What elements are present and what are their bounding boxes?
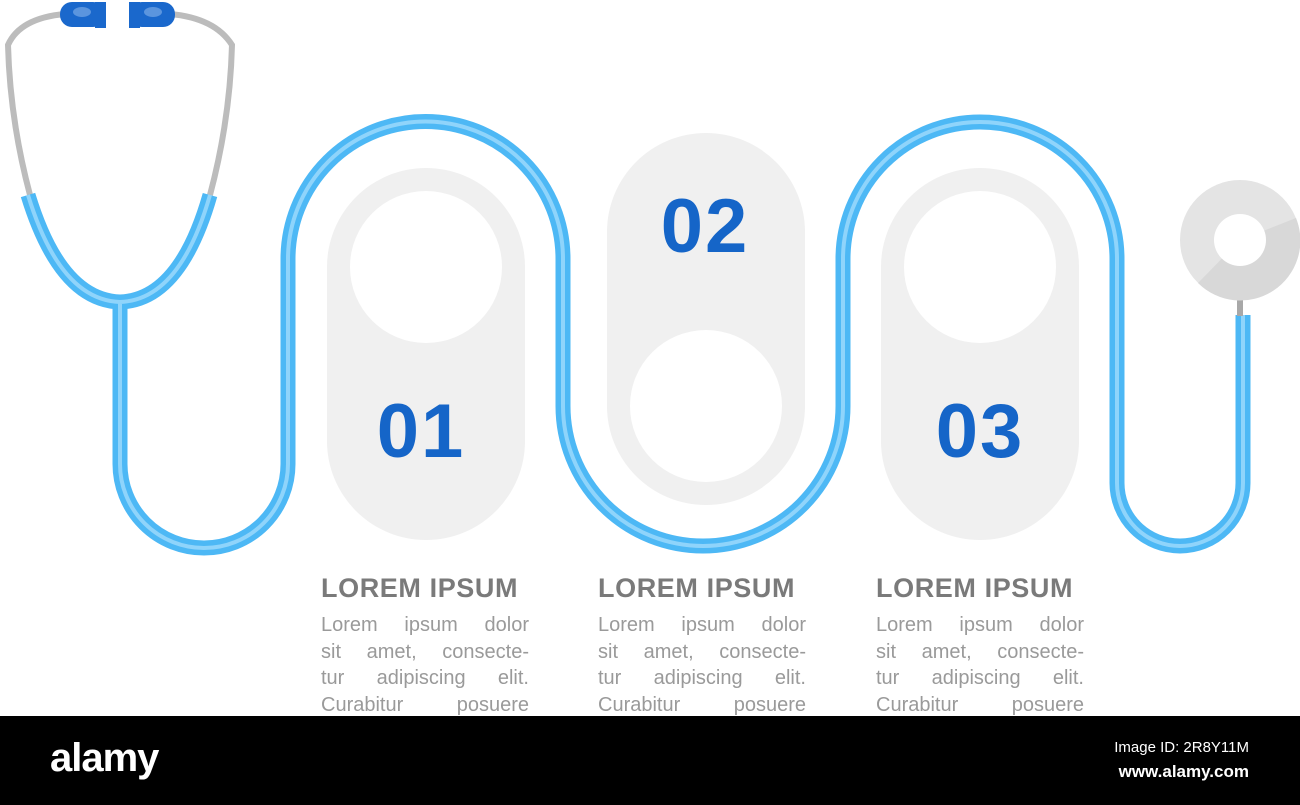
text block 3: Curabitur	[876, 694, 958, 716]
text block 1: Curabitur	[321, 694, 403, 716]
logo text: alamy	[50, 736, 158, 780]
panel: 01 background	[327, 168, 525, 540]
text block 2: Lorem	[598, 614, 655, 636]
text block 2: adipiscing	[654, 667, 743, 689]
number 02: 02	[661, 184, 749, 269]
text block 3: ipsum	[959, 614, 1013, 636]
text block 2: Curabitur	[598, 694, 680, 716]
text block 3: LOREM IPSUM	[876, 573, 1073, 603]
text block 3	[876, 573, 1084, 716]
text block 1: Lorem	[321, 614, 378, 636]
text block 3: dolor	[1040, 614, 1084, 636]
icon: chest piece	[1180, 180, 1300, 316]
text block 2: sit	[598, 641, 618, 663]
text block 2: consecte-	[719, 641, 806, 663]
text block 2: dolor	[762, 614, 806, 636]
text block 3: adipiscing	[932, 667, 1021, 689]
text block 3: consecte-	[997, 641, 1084, 663]
text block 1: amet,	[367, 641, 417, 663]
number 01: 01	[377, 389, 465, 474]
text block 1: LOREM IPSUM	[321, 573, 518, 603]
text block 3: sit	[876, 641, 896, 663]
text block 1: tur	[321, 667, 344, 689]
icon: earpieces	[60, 2, 175, 28]
text block 2: posuere	[734, 694, 806, 716]
text block 1	[321, 573, 529, 716]
text block 3: elit.	[1053, 667, 1084, 689]
text block 2: elit.	[775, 667, 806, 689]
text block 1: posuere	[457, 694, 529, 716]
footer bar	[0, 716, 1300, 805]
text block 1: consecte-	[442, 641, 529, 663]
text block 1: elit.	[498, 667, 529, 689]
text block 1: adipiscing	[377, 667, 466, 689]
text block 1: dolor	[484, 614, 529, 636]
icon: stethoscope main tube	[28, 122, 1243, 548]
text block 3: amet,	[922, 641, 972, 663]
image id	[1114, 739, 1249, 781]
text block 1: sit	[321, 641, 341, 663]
text block 2: ipsum	[681, 614, 735, 636]
text block 2	[598, 573, 806, 716]
image id: Image ID: 2R8Y11M	[1114, 739, 1249, 756]
text block 2: tur	[598, 667, 621, 689]
text block 3: tur	[876, 667, 899, 689]
image id: www.alamy.com	[1119, 762, 1249, 781]
text block 3: Lorem	[876, 614, 933, 636]
text block 1: ipsum	[404, 614, 458, 636]
icon: stethoscope binaural gray tubes	[8, 14, 232, 195]
text block 3: posuere	[1012, 694, 1084, 716]
panel: 03 background	[881, 168, 1079, 540]
number 03: 03	[936, 389, 1024, 474]
panel: 02 background	[607, 133, 805, 505]
text block 2: LOREM IPSUM	[598, 573, 795, 603]
text block 2: amet,	[644, 641, 694, 663]
